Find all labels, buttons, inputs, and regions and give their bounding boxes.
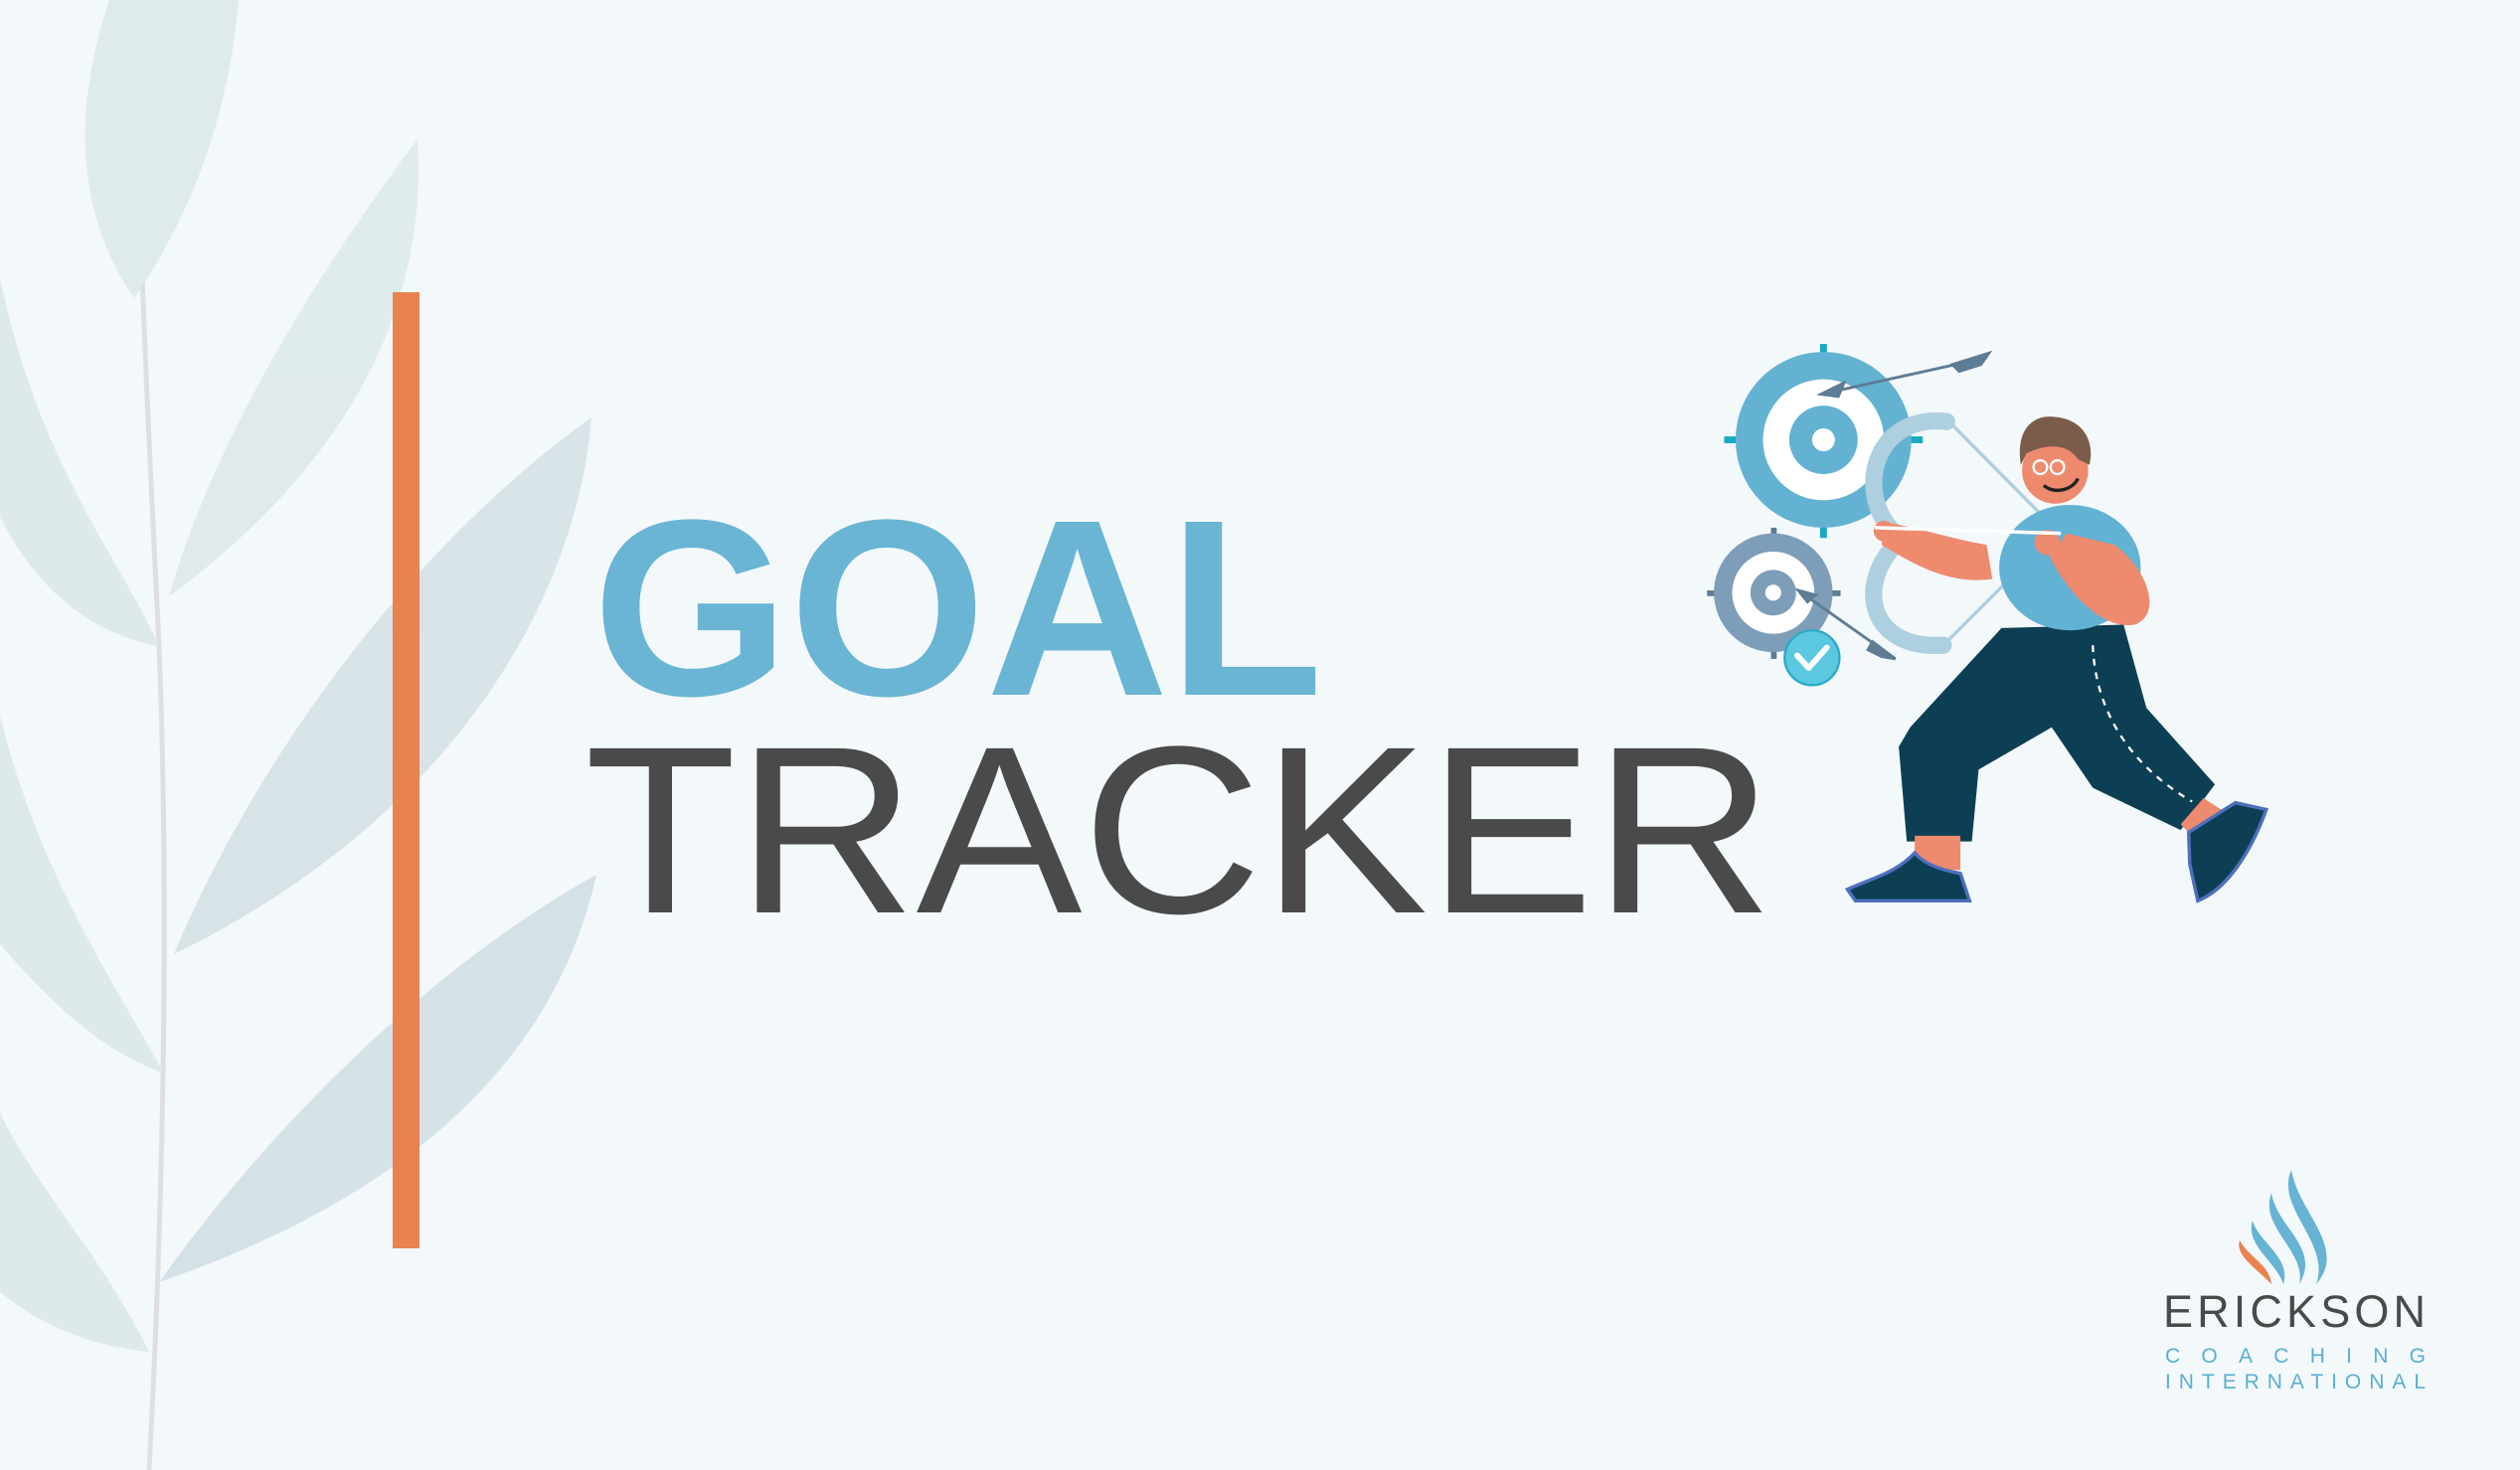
logo text: ERICKSON: [2163, 1286, 2426, 1337]
icon: big target: [1724, 344, 1923, 538]
orange vertical bar: [393, 292, 420, 1248]
icon: flames: [2239, 1170, 2327, 1284]
logo: Erickson Coaching International: INTERNATIONAL: [2165, 1371, 2426, 1393]
shoes: [1847, 853, 1969, 900]
bow: [1874, 421, 2058, 645]
icon: check circle: [1784, 630, 1839, 685]
title: TRACKER: TRACKER: [585, 697, 1773, 963]
pants: [1899, 624, 2215, 842]
illustration: archer with targets: [1707, 344, 2267, 900]
decorative leaves: [0, 0, 596, 1470]
arrow in bow: [1875, 528, 2061, 534]
logo: Erickson Coaching International: [2163, 1170, 2426, 1393]
legs skin: [1915, 836, 1960, 870]
arms: [1882, 522, 1992, 580]
logo: Erickson Coaching International: COACHING: [2165, 1345, 2426, 1368]
title: GOAL: GOAL: [592, 467, 1323, 748]
shirt: [1999, 505, 2140, 630]
icon: small target: [1707, 528, 1841, 659]
head: [2022, 437, 2089, 504]
person: [1847, 416, 2267, 900]
arrows: [1798, 353, 1989, 659]
